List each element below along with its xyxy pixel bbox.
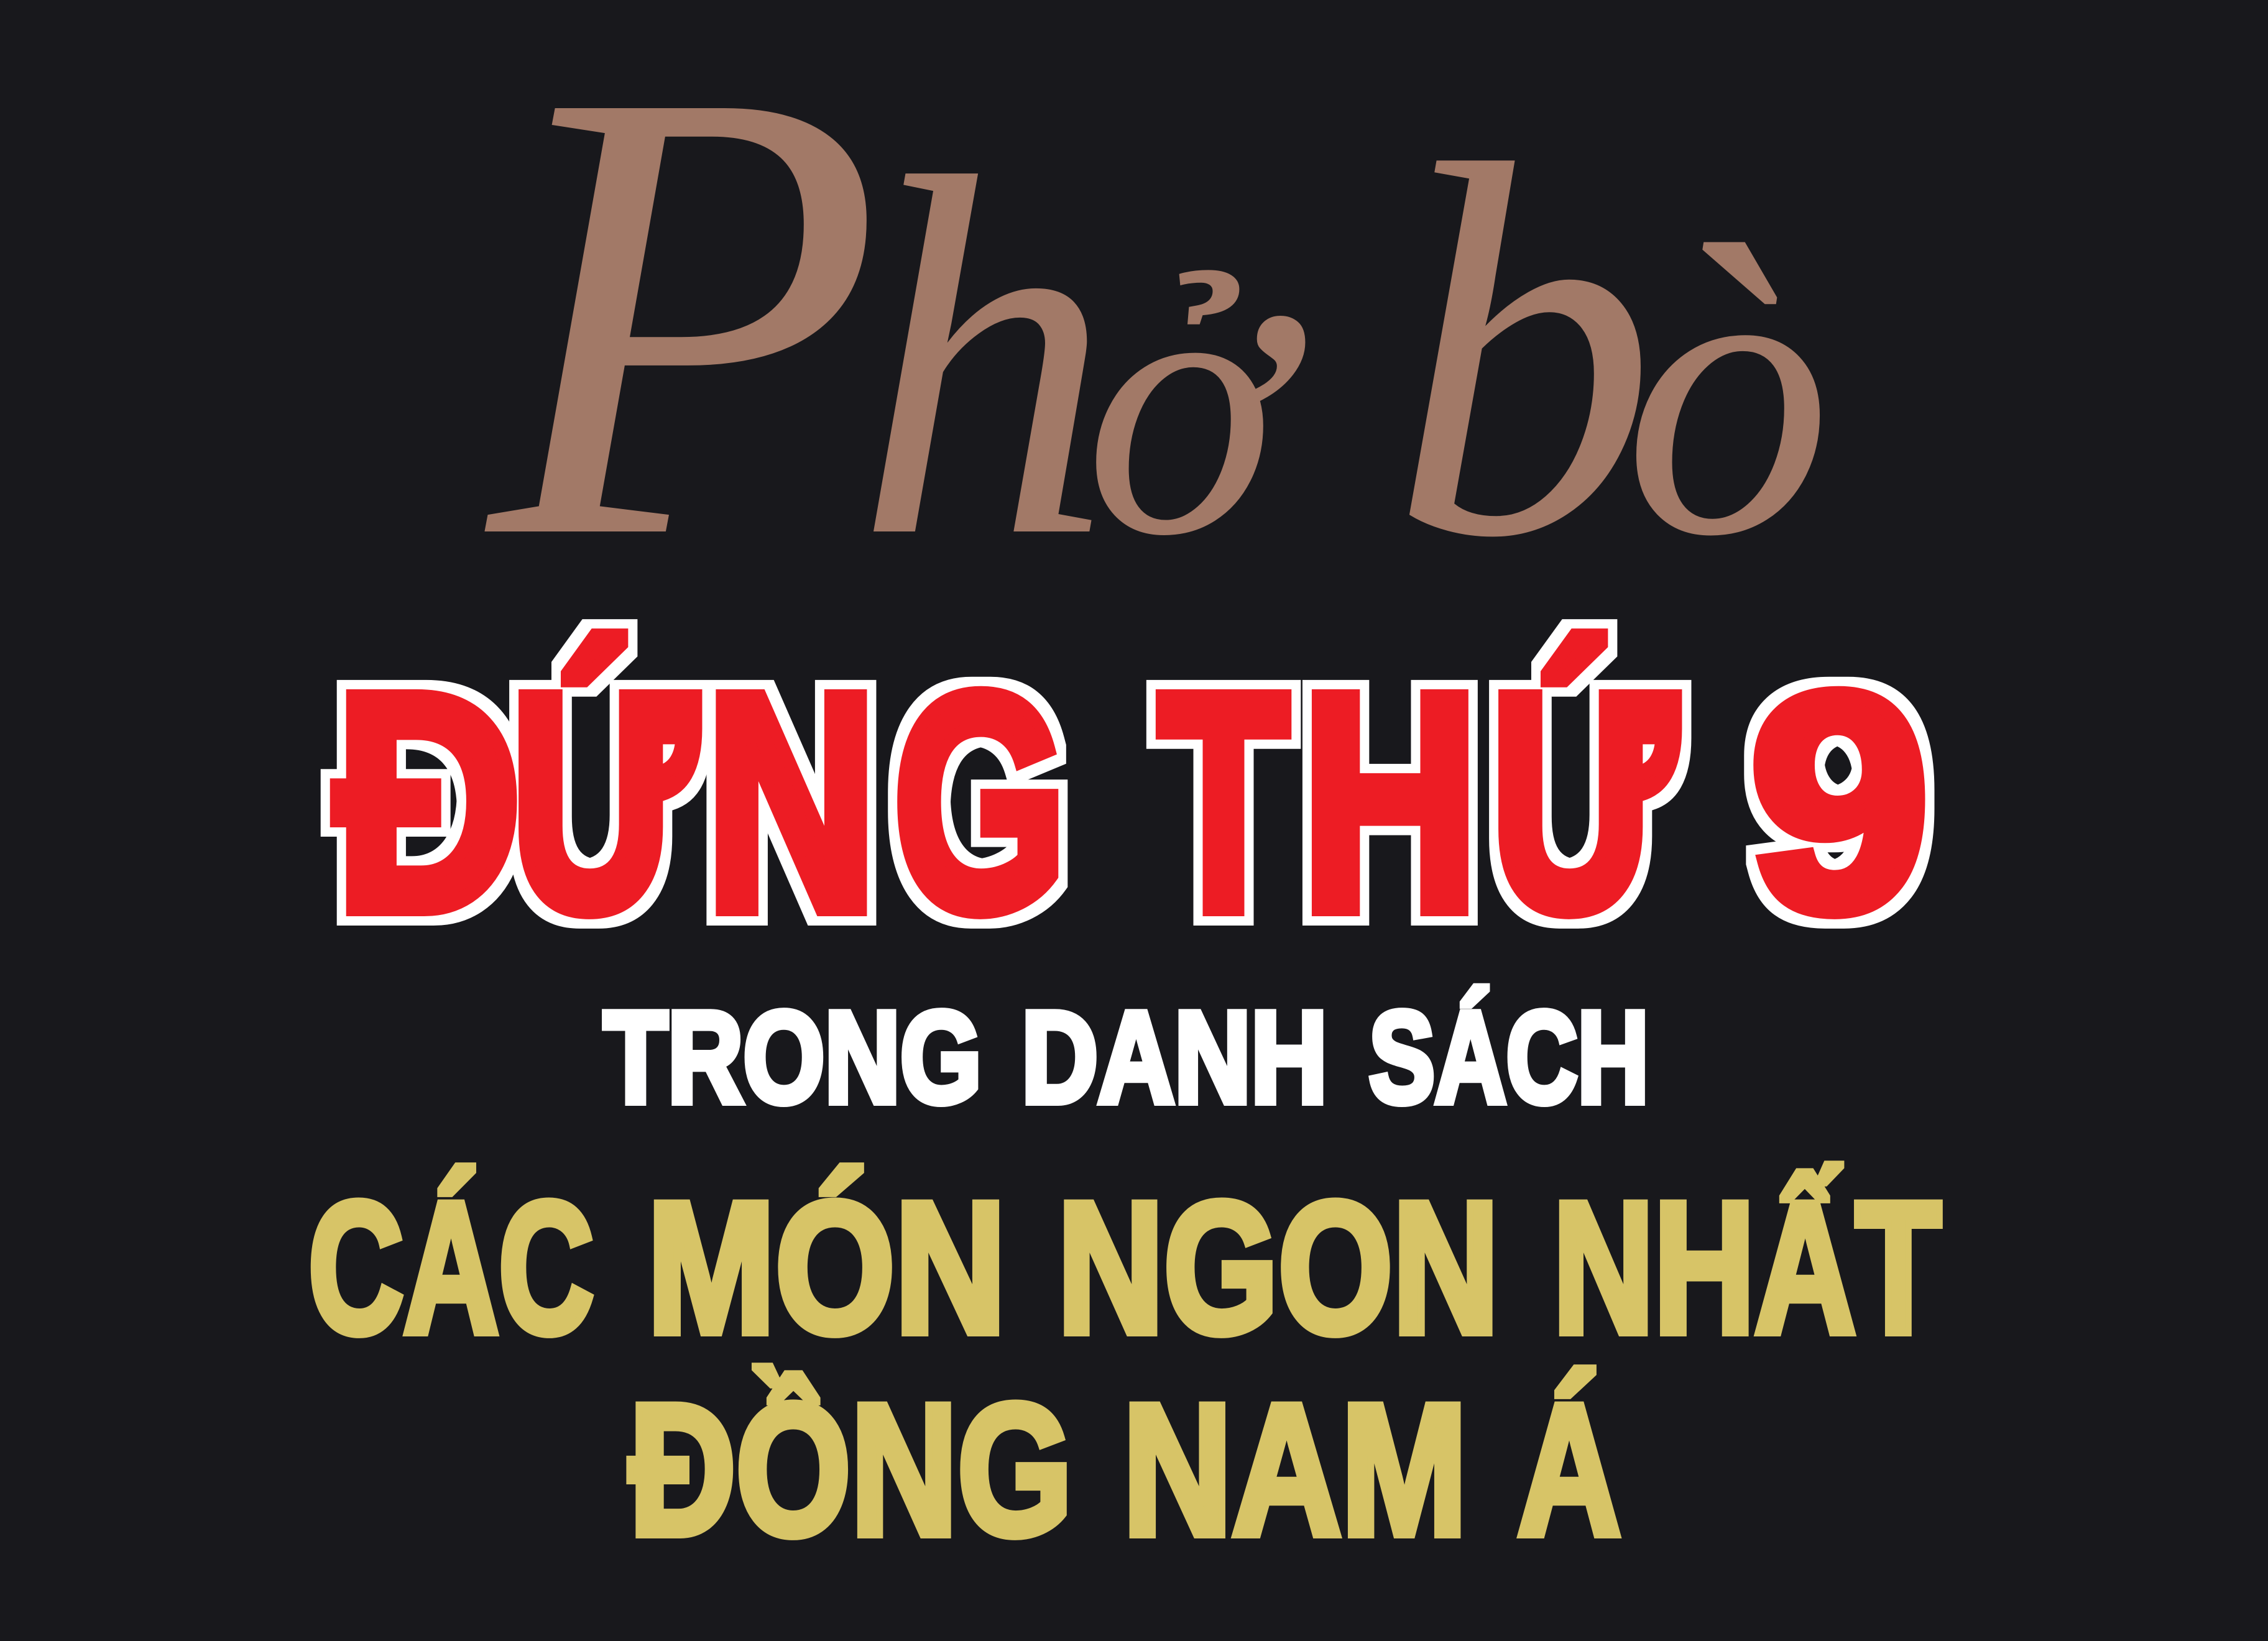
headline: ĐỨNG THỨ 9: H (1302, 632, 1478, 973)
script title: Phở bò: b (1390, 56, 1657, 648)
script title: Phở bò: ở (1085, 193, 1310, 614)
headline: ĐỨNG THỨ 9: T (1159, 632, 1288, 973)
script title: Phở bò: ò (1624, 160, 1832, 622)
gold line 1: CÁC MÓN NGON NHẤT: NGON (1058, 1163, 1499, 1372)
headline: ĐỨNG THỨ 9: Đ (336, 632, 521, 973)
headline: ĐỨNG THỨ 9: N (706, 632, 877, 973)
gold line 2: ĐỒNG NAM Á: NAM (1123, 1365, 1467, 1574)
subheading: TRONG DANH SÁCH: DANH (1021, 985, 1327, 1130)
gold line 1: CÁC MÓN NGON NHẤT: MÓN (647, 1163, 1006, 1372)
subheading: TRONG DANH SÁCH: TRONG (604, 985, 982, 1130)
headline: ĐỨNG THỨ 9: Ứ (1491, 632, 1679, 973)
script title: Phở bò: h (855, 71, 1113, 643)
headline: ĐỨNG THỨ 9: 9 (1751, 632, 1929, 973)
subheading: TRONG DANH SÁCH: SÁCH (1369, 985, 1649, 1130)
gold line 1: CÁC MÓN NGON NHẤT: CÁC (308, 1163, 594, 1372)
headline: ĐỨNG THỨ 9: G (894, 632, 1066, 973)
gold line 2: ĐỒNG NAM Á: Á (1518, 1365, 1621, 1574)
gold line 1: CÁC MÓN NGON NHẤT: NHẤT (1553, 1163, 1941, 1372)
headline: ĐỨNG THỨ 9: Ứ (511, 632, 699, 973)
gold line 2: ĐỒNG NAM Á: ĐỒNG (629, 1365, 1072, 1574)
